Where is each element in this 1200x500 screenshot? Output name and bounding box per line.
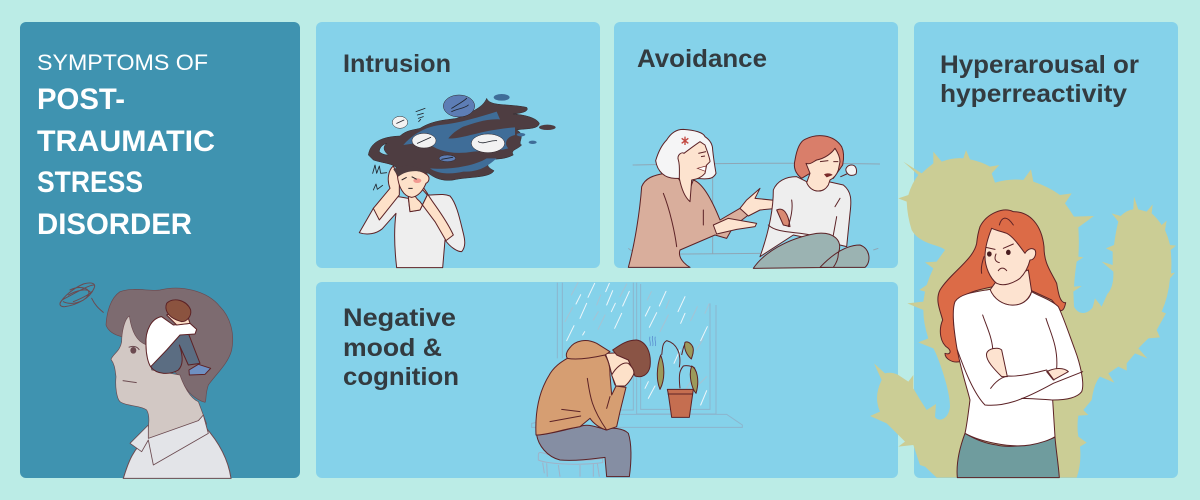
face [397,170,429,197]
heading: symptoms of PTSD: DISORDER [37,208,192,241]
white hair [656,129,716,179]
older woman [628,129,777,267]
heading: intrusion: Intrusion [343,50,451,78]
heading: hyperarousal or hyperreactivity: Hyperarousal or [940,51,1139,79]
heading: negative mood and cognition: mood & [343,334,442,362]
sofa outline [628,163,880,254]
hair top [393,166,428,177]
heading: negative mood and cognition: cognition [343,363,459,391]
panel: intrusion [316,22,600,268]
heading: symptoms of PTSD: STRESS [37,166,143,199]
puff of breath [846,165,856,175]
shirt [123,427,231,478]
face [985,228,1036,285]
hair [938,210,1066,362]
dark hair cloud [368,98,539,180]
heading: symptoms of PTSD: SYMPTOMS OF [37,50,208,75]
cactus silhouette [870,150,1176,478]
pants [957,433,1059,478]
illustration: person with swirling dark hair [359,94,556,268]
shirt [359,194,465,268]
blue hair streaks [403,112,515,153]
red hair [794,136,844,178]
face [806,148,840,191]
man [536,340,650,477]
arms and neck [373,166,453,241]
thought bubbles [392,94,556,162]
rain [567,283,707,405]
hair [106,288,233,402]
collar [130,415,208,465]
heading: symptoms of PTSD: POST- [37,83,125,116]
illustration: angry woman and cactus [870,150,1176,478]
panel: title and head illustration [20,22,300,478]
illustration: two women arguing on a sofa [628,129,880,268]
stress squiggles [373,108,425,190]
face and neck [111,316,207,440]
window frame [532,283,742,427]
wilted plant [657,341,698,417]
wavy air mark [650,336,656,346]
illustration: man with head in hands by a rainy window [532,283,742,477]
heading: negative mood and cognition: Negative [343,304,456,332]
illustration: head with curled-up figure inside [60,283,233,478]
face [678,142,710,202]
heading: hyperarousal or hyperreactivity: hyperreactivity [940,80,1127,108]
panel: hyperarousal or hyperreactivity [870,22,1178,478]
heading: negative mood and cognition [343,304,459,391]
scribble thought [60,283,103,312]
neck [990,270,1032,305]
panel: avoidance [614,22,898,268]
panel: negative mood and cognition [316,282,898,478]
hair [613,340,650,377]
flower pot [667,389,693,417]
crossed hands [986,348,1068,380]
younger woman [753,136,869,268]
heading: avoidance: Avoidance [637,45,767,73]
curled-up figure [146,300,211,375]
hands over face [612,363,634,386]
heading: symptoms of PTSD [37,50,215,241]
stool [538,453,603,477]
woman [938,210,1083,478]
shirt [953,289,1083,446]
heading: hyperarousal or hyperreactivity [940,51,1139,108]
heading: symptoms of PTSD: TRAUMATIC [37,125,215,158]
